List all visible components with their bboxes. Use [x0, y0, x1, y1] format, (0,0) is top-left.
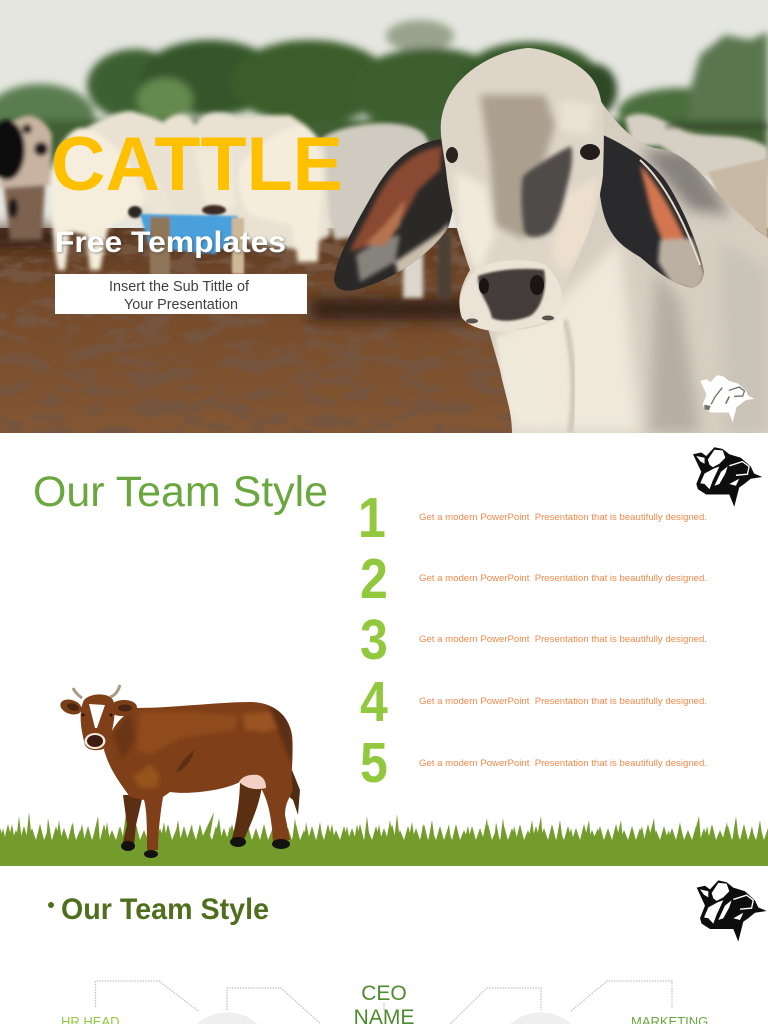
- subtitle box: Insert the Sub Tittle of: [109, 279, 250, 295]
- list item 4: Get a modern PowerPoint Presentation that is beautifully designed.: [419, 696, 707, 706]
- org chart: [96, 981, 672, 1024]
- list item 2: [360, 547, 707, 611]
- grass strip: [0, 812, 768, 866]
- list item 3: [360, 608, 707, 672]
- ground: [0, 228, 768, 433]
- list item 3: Get a modern PowerPoint Presentation that is beautifully designed.: [419, 634, 707, 644]
- list item 2: 2: [360, 547, 388, 611]
- panel: hero photo of cattle: [0, 0, 768, 435]
- title: CATTLE: CATTLE: [51, 122, 343, 207]
- ground shadows: [0, 226, 470, 320]
- dotted connectors: [96, 981, 672, 1024]
- list item 4: [360, 670, 707, 734]
- list item 1: [358, 486, 707, 550]
- background herd: [0, 111, 768, 298]
- list item 5: 5: [360, 731, 388, 795]
- sky: [0, 0, 768, 240]
- body and neck: [480, 90, 768, 435]
- right ear: [600, 135, 704, 288]
- horns: [73, 688, 82, 698]
- udder: [239, 775, 266, 789]
- icon: white cow head logo: [700, 375, 755, 422]
- list item 5: Get a modern PowerPoint Presentation that is beautifully designed.: [419, 758, 707, 768]
- head: [81, 694, 115, 750]
- illustration: brown cow: [58, 685, 300, 858]
- label: CEO NAME: [354, 982, 414, 1024]
- neighbouring cow back: [708, 158, 768, 240]
- heading: Our Team Style (slide 2): Our Team Style: [33, 468, 328, 516]
- list item 1: 1: [358, 486, 386, 550]
- list item 5: [360, 731, 707, 795]
- right avatar circle: [510, 1012, 571, 1024]
- ears: [58, 697, 84, 717]
- list item 3: 3: [360, 608, 388, 672]
- icon: black cow head logo (slide 3): [697, 880, 767, 942]
- list item 1: Get a modern PowerPoint Presentation that is beautifully designed.: [419, 512, 707, 522]
- numbered list: [358, 486, 707, 795]
- head: [440, 48, 604, 330]
- main brahman cow: [330, 40, 768, 435]
- label: CEO NAME: CEO: [361, 982, 407, 1005]
- body: [104, 702, 293, 850]
- blue trough: [128, 205, 244, 275]
- subtitle box: Your Presentation: [124, 297, 238, 313]
- far legs: [122, 795, 143, 846]
- heading: Free Templates: Free Templates: [55, 226, 286, 259]
- left avatar circle: [197, 1012, 258, 1024]
- tail: [287, 770, 300, 815]
- list item 2: Get a modern PowerPoint Presentation that is beautifully designed.: [419, 573, 707, 583]
- list item 4: 4: [360, 670, 388, 734]
- hooves: [121, 841, 135, 851]
- heading: Our Team Style (slide 3): Our Team Style: [61, 893, 269, 926]
- muzzle: [460, 260, 563, 331]
- subtitle box: [55, 274, 307, 314]
- tree line: [0, 20, 768, 170]
- left ear: [334, 139, 452, 291]
- icon: black cow head logo (slide 2): [693, 447, 762, 507]
